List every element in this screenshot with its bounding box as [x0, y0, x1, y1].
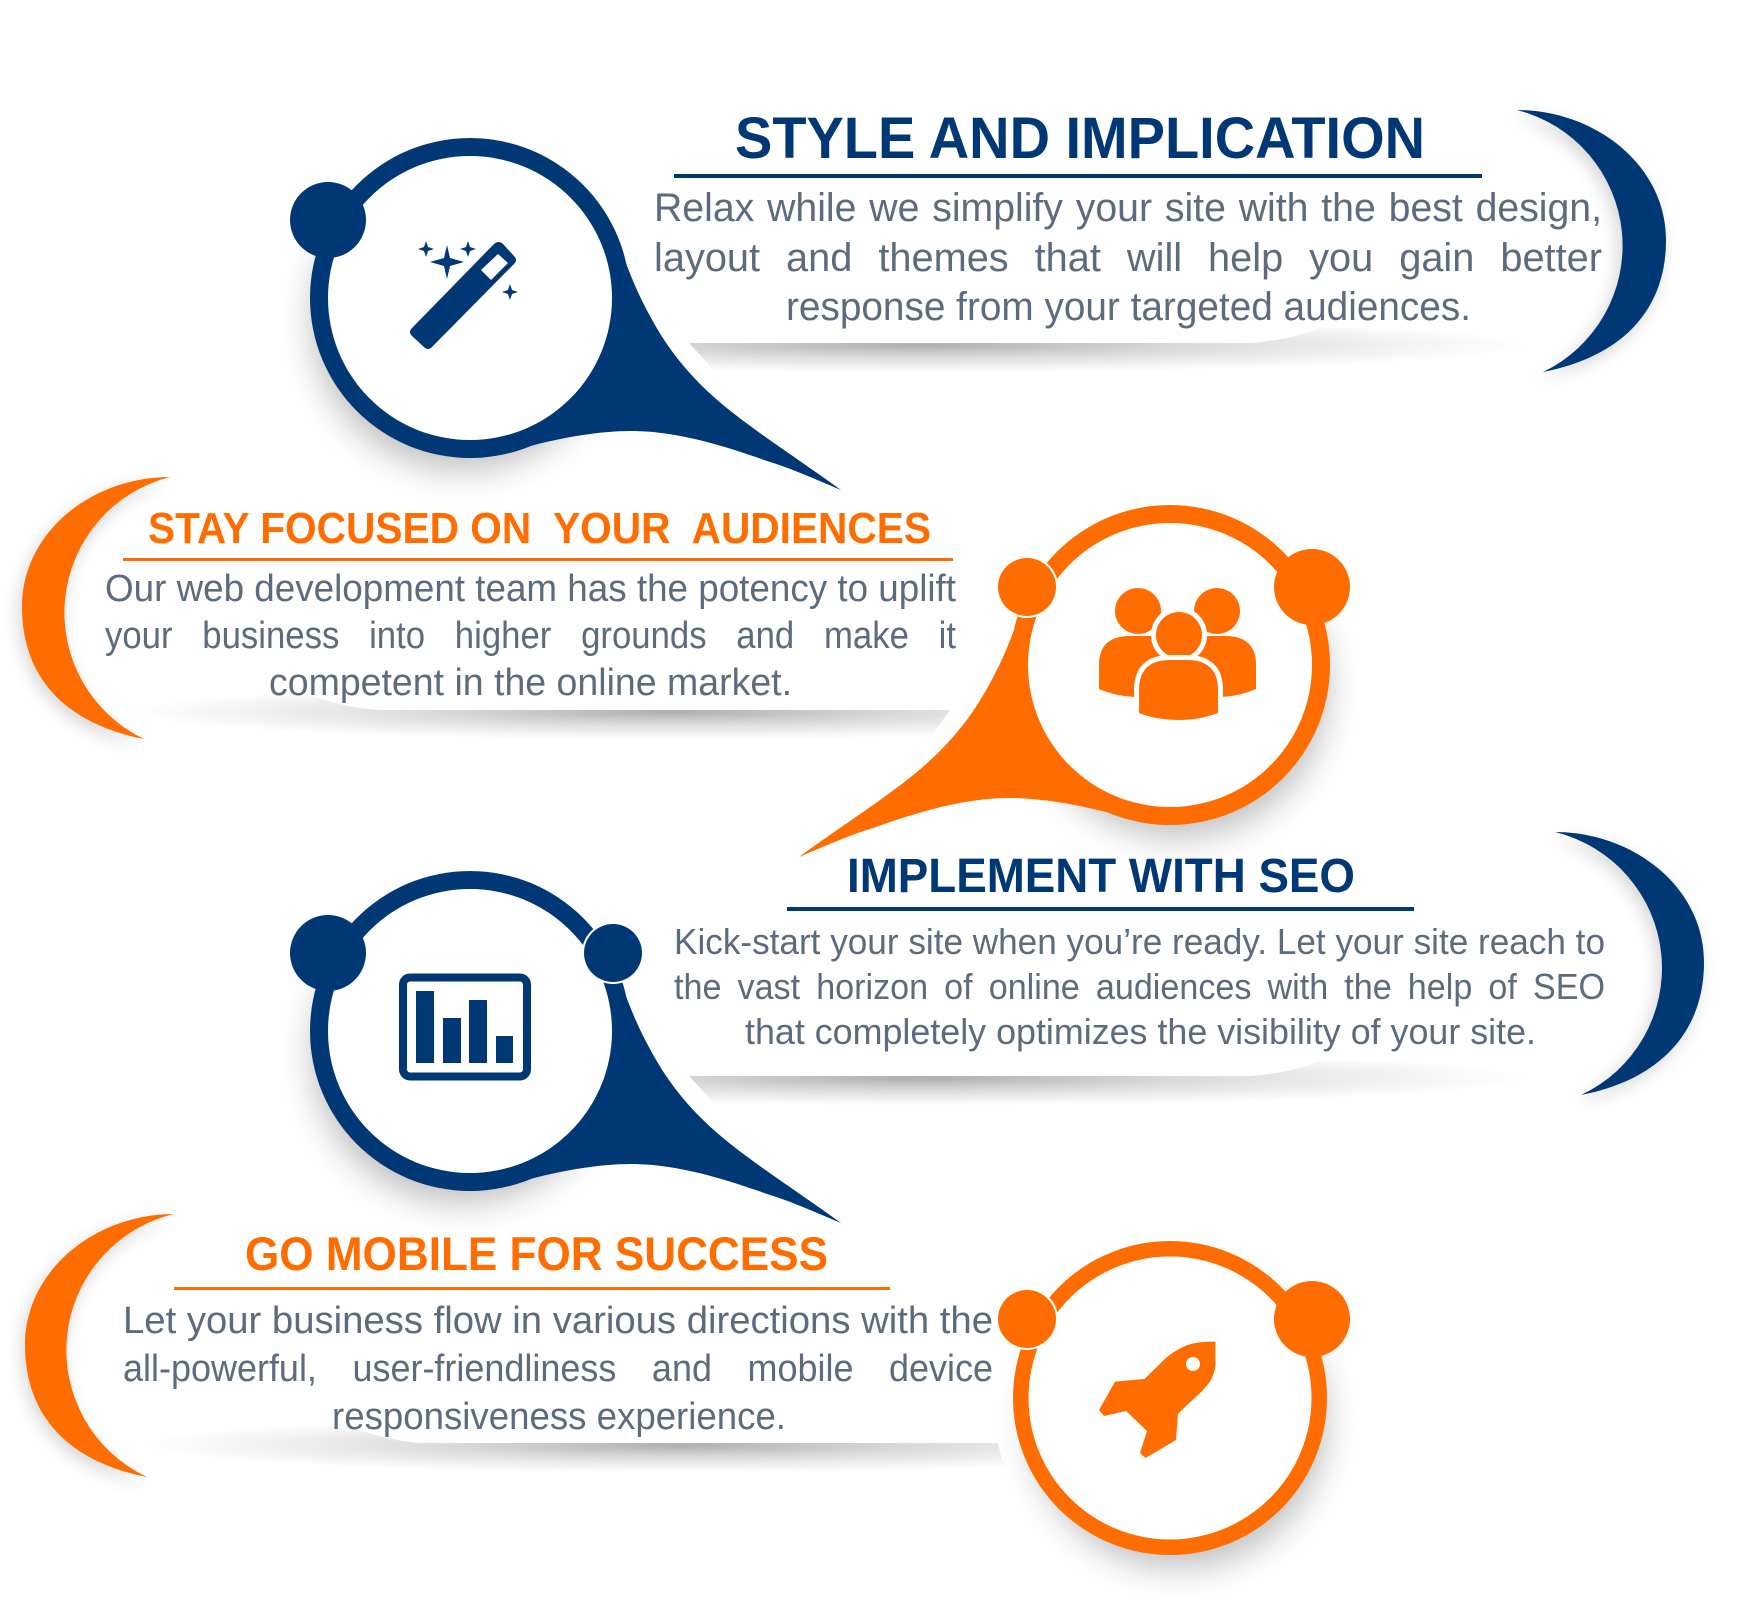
circle shadow	[312, 170, 612, 470]
text shadow bar	[689, 330, 1444, 369]
body text	[105, 568, 956, 704]
circle halo over shadow	[998, 1226, 1342, 1570]
crescent	[22, 477, 170, 739]
body text	[123, 1300, 993, 1438]
panel: implement with seo	[290, 832, 1704, 1223]
crescent	[1555, 832, 1704, 1095]
callout ring	[998, 1241, 1350, 1555]
text shadow bar	[215, 1428, 1002, 1469]
circle shadow	[312, 903, 612, 1203]
body text: competent in the online market.	[269, 662, 792, 704]
body text: Let your business flow in various directions with the	[123, 1300, 993, 1342]
callout ring and tail	[290, 138, 841, 490]
icon: rocket	[1099, 1342, 1215, 1458]
body text	[654, 186, 1602, 329]
body text: Kick-start your site when you’re ready. Let your site reach to	[674, 921, 1605, 962]
body text: Relax while we simplify your site with the best design,	[654, 186, 1602, 230]
panel: style and implication	[290, 106, 1666, 490]
text shadow bar	[205, 696, 950, 736]
circle shadow	[1030, 1272, 1326, 1568]
circle shadow	[1028, 537, 1328, 837]
body text: the vast horizon of online audiences with the help of SEO	[674, 966, 1605, 1007]
panel: go mobile for success	[25, 1214, 1350, 1570]
icon: bar chart	[403, 978, 527, 1076]
body text: all-powerful, user-friendliness and mobile device	[123, 1348, 993, 1390]
body text: responsiveness experience.	[332, 1396, 786, 1438]
text shadow bar	[689, 1062, 1446, 1102]
heading: STYLE AND IMPLICATION	[735, 106, 1425, 171]
heading: STAY FOCUSED ON YOUR AUDIENCES	[148, 504, 931, 553]
callout ring and tail	[290, 871, 841, 1223]
icon: magic wand	[410, 241, 518, 349]
crescent	[1517, 110, 1666, 372]
heading: GO MOBILE FOR SUCCESS	[245, 1227, 828, 1280]
body text: that completely optimizes the visibility of your site.	[745, 1011, 1536, 1052]
body text: response from your targeted audiences.	[786, 285, 1471, 329]
body text: layout and themes that will help you gain better	[654, 236, 1602, 280]
body text: Our web development team has the potency to uplift	[105, 568, 956, 610]
crescent	[25, 1214, 174, 1477]
panel: stay focused on your audiences	[22, 477, 1350, 857]
heading: IMPLEMENT WITH SEO	[847, 850, 1355, 903]
body text: your business into higher grounds and make it	[105, 615, 956, 657]
icon: people group	[1099, 588, 1256, 720]
body text	[674, 921, 1605, 1052]
callout ring and tail	[799, 505, 1350, 857]
